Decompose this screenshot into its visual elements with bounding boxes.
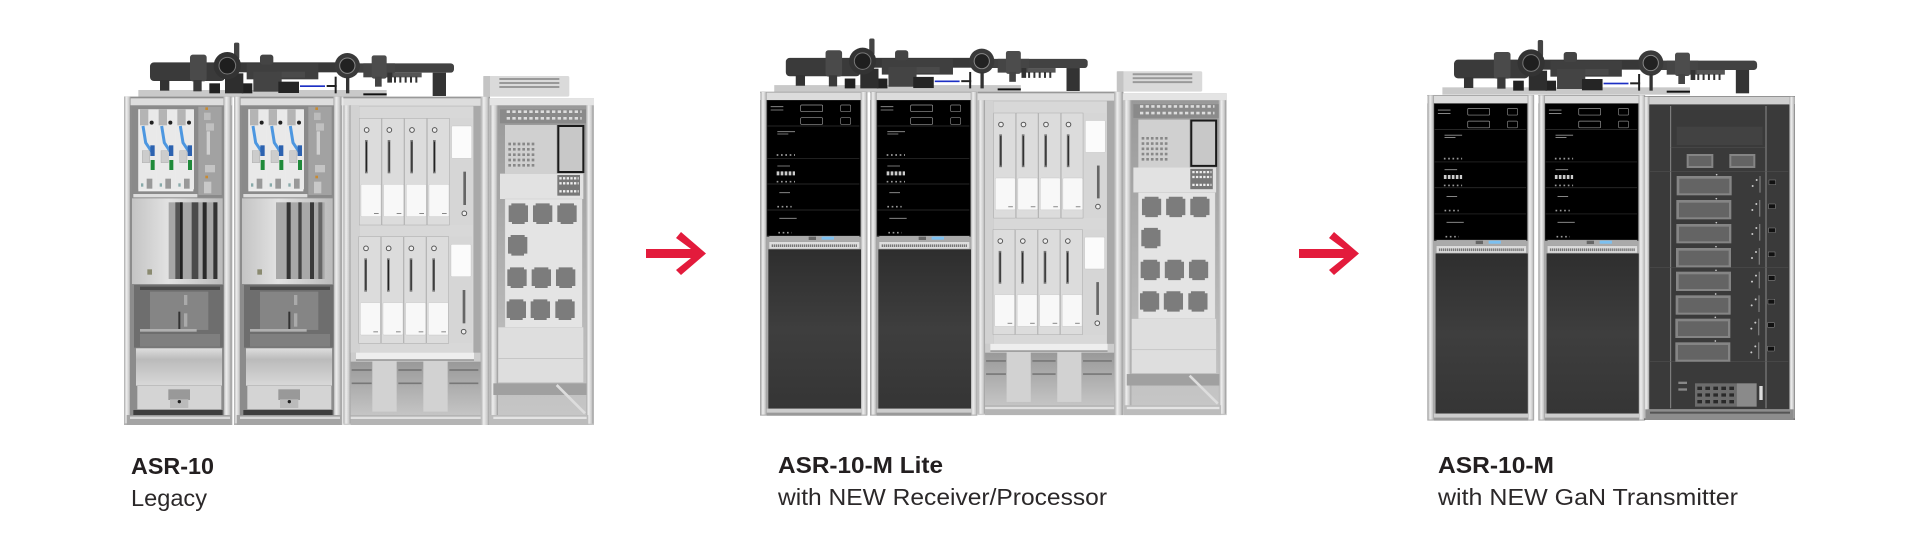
text block: ASR-10 caption: Legacy (131, 485, 207, 511)
text block: ASR-10 caption: ASR-10 (131, 453, 214, 479)
icon: top waveguide assembly (774, 38, 1088, 92)
cabinet: transmitter modules (978, 92, 1123, 415)
cabinet: new receiver/processor 1 (1427, 95, 1534, 421)
icon: top waveguide assembly (1442, 40, 1757, 95)
cabinet: power supply (1117, 71, 1227, 415)
cabinet: new receiver/processor 2 (1538, 95, 1645, 421)
arrow: ASR-10-M Lite to ASR-10-M (1299, 232, 1359, 275)
arrow: ASR-10 to ASR-10-M Lite (646, 232, 706, 275)
text block: ASR-10-M Lite caption (777, 452, 1107, 510)
icon: top waveguide assembly (138, 43, 454, 97)
panel: ASR-10 legacy equipment (124, 43, 594, 425)
cabinet: GaN transmitter (1644, 96, 1795, 420)
cabinet: new receiver/processor 2 (870, 92, 977, 416)
text block: ASR-10-M caption: ASR-10-M (1438, 452, 1554, 478)
text block: ASR-10-M Lite caption: with NEW Receiver/Processor (777, 484, 1107, 510)
panel: ASR-10-M Lite equipment (760, 38, 1227, 416)
cabinet: power supply (483, 76, 594, 425)
cabinet: legacy receiver 2 (234, 97, 342, 425)
text block: ASR-10-M caption (1437, 452, 1738, 510)
text block: ASR-10-M caption: with NEW GaN Transmitter (1437, 484, 1738, 510)
cabinet: transmitter modules (343, 97, 490, 425)
text block: ASR-10-M Lite caption: ASR-10-M Lite (778, 452, 943, 478)
text block: ASR-10 caption (131, 453, 214, 511)
cabinet: legacy receiver 1 (124, 97, 232, 425)
panel: ASR-10-M equipment (1427, 40, 1795, 421)
cabinet: new receiver/processor 1 (760, 92, 867, 416)
